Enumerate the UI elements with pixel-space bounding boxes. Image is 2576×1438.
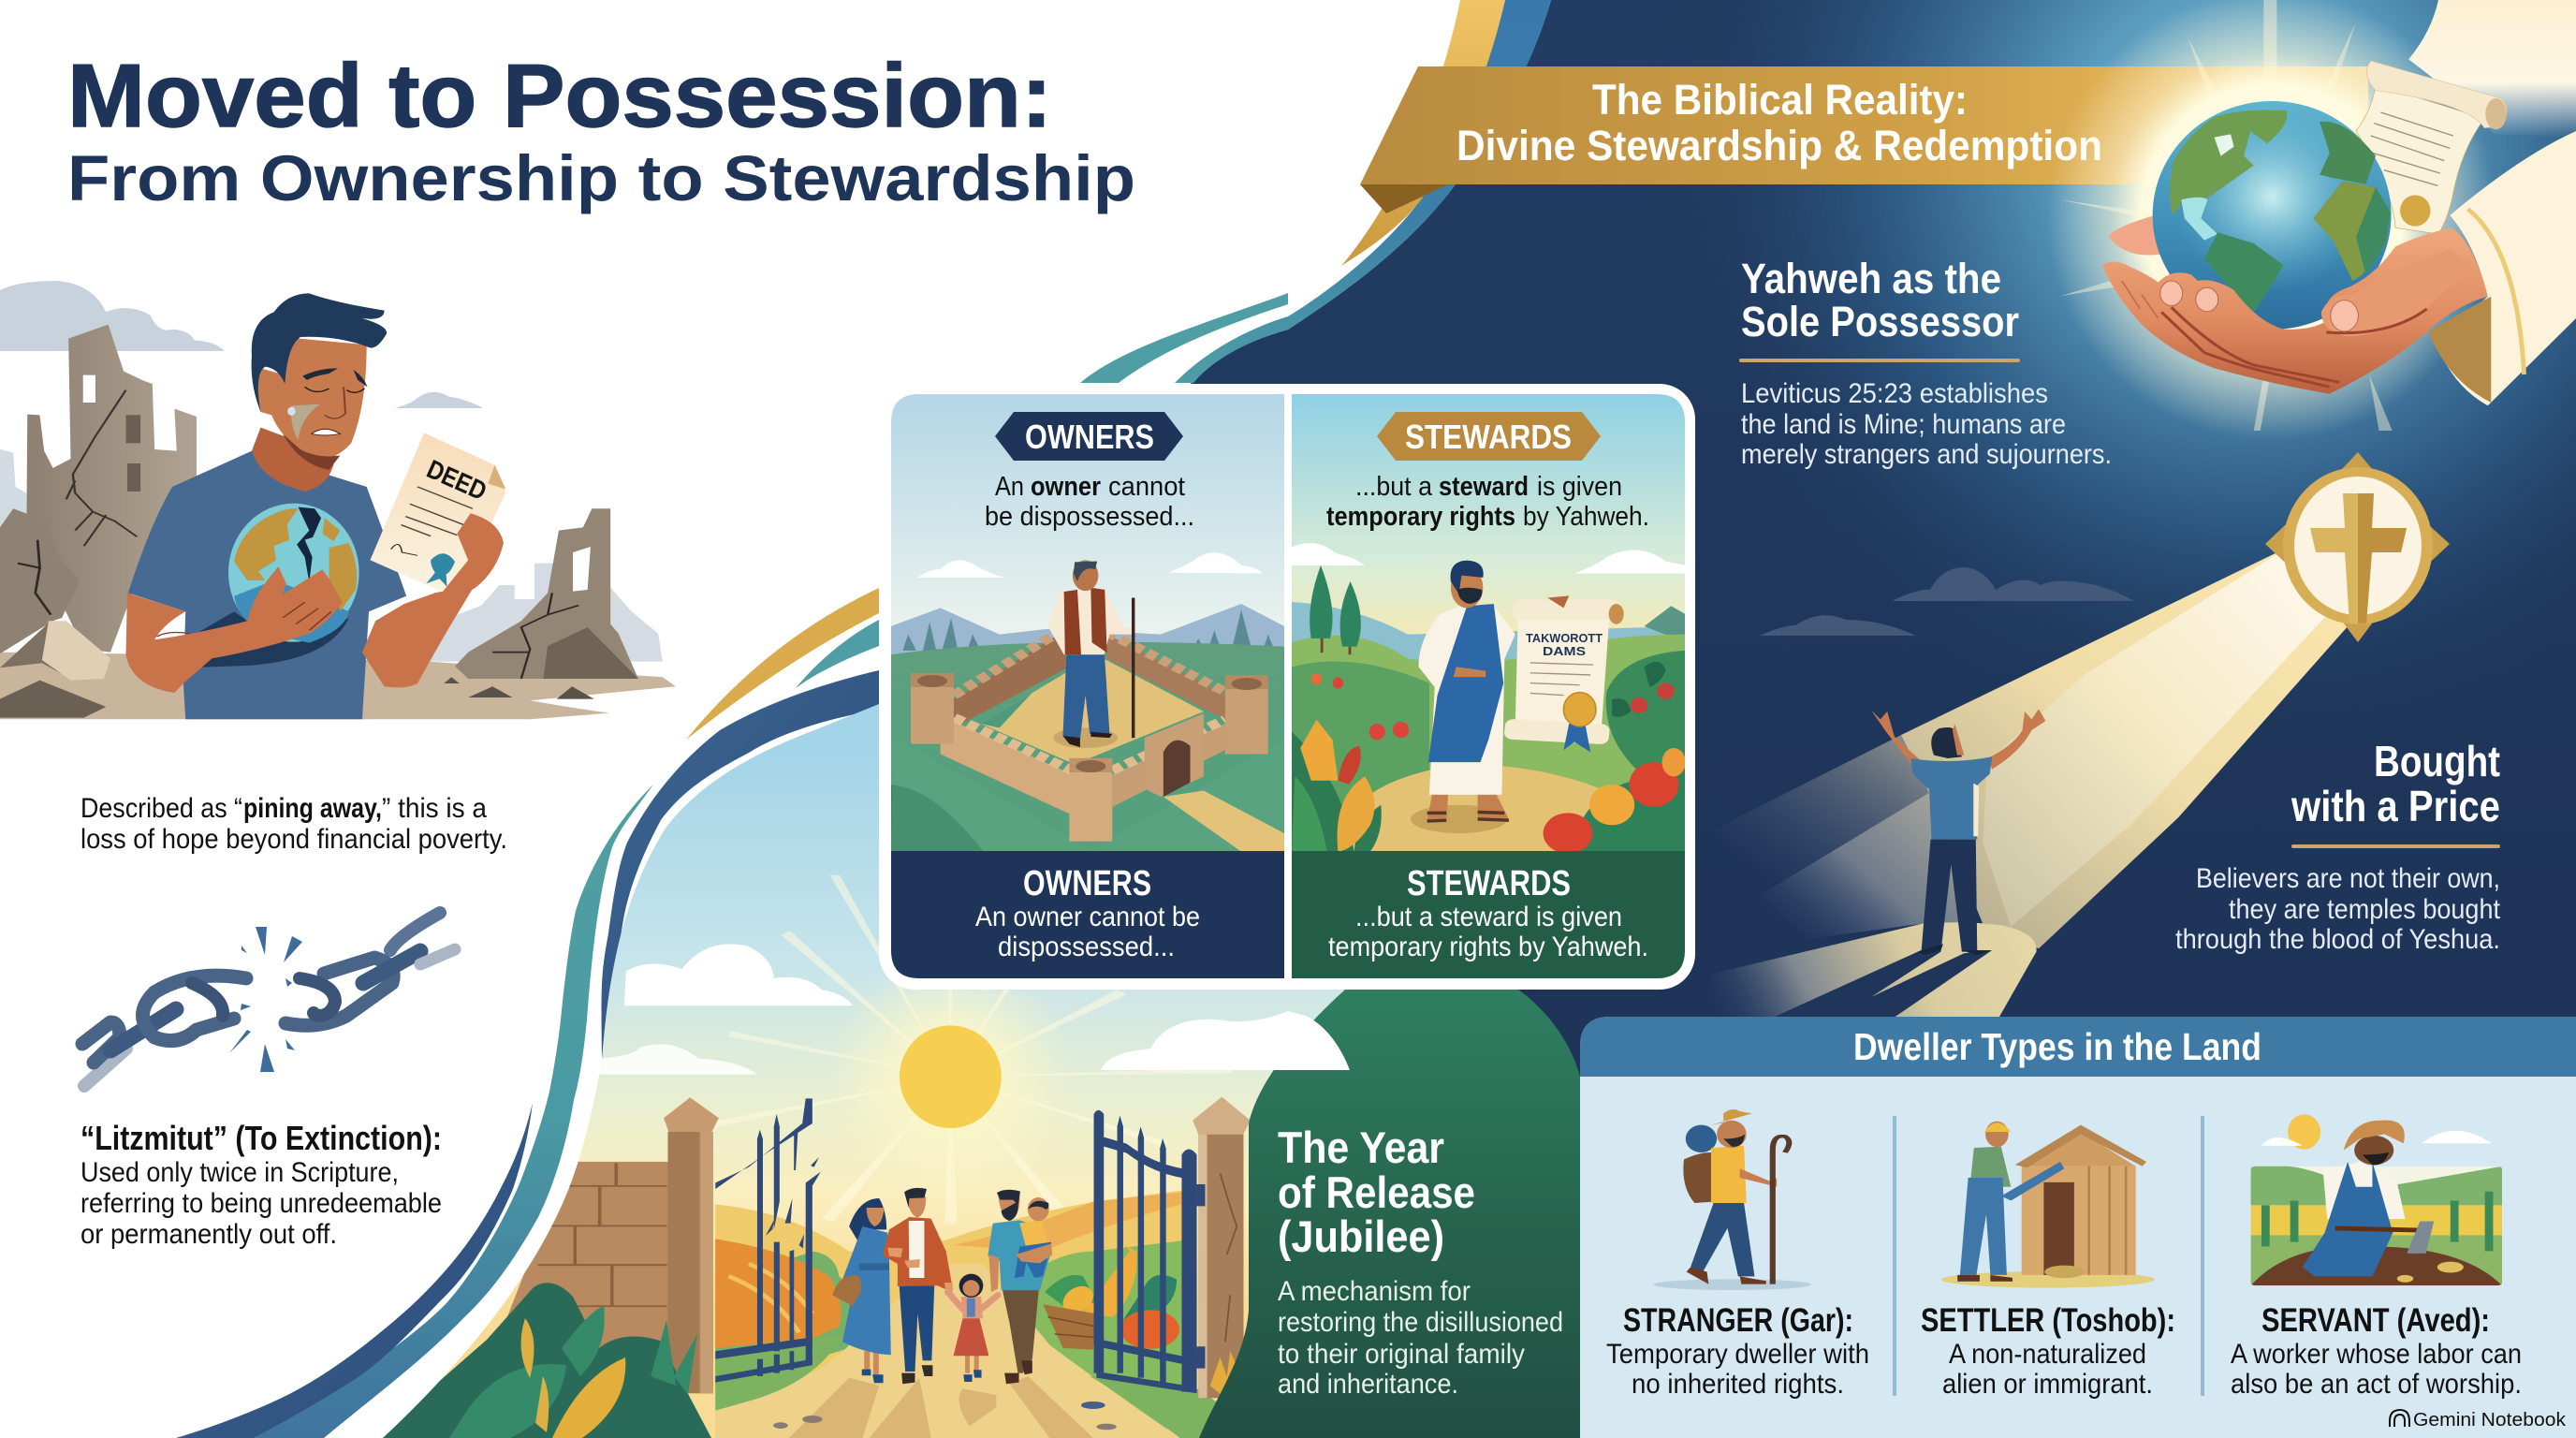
clouds on night sky [1760, 567, 2134, 636]
man hair [252, 293, 387, 412]
stewards caption strip [1292, 851, 1685, 978]
path stones [773, 1401, 1117, 1430]
owners description: owner [1031, 472, 1101, 502]
right gate post [1193, 1097, 1251, 1398]
person [1871, 709, 2045, 955]
rolling hills [715, 1189, 1244, 1438]
swoosh: top gold and blue bands [1080, 0, 1551, 383]
panel: year of release: to their original family [1278, 1339, 1525, 1370]
icon: broken chain [82, 913, 455, 1086]
text: Yahweh as the sole possessor: Sole Possessor [1741, 298, 2019, 345]
text on scroll: DAMS [1543, 644, 1586, 658]
stewards description: ...but a [1355, 472, 1433, 502]
text: bought with a price: they are temples bought [2229, 894, 2501, 925]
child [947, 1274, 998, 1382]
icon: settler and wooden hut [1941, 1122, 2155, 1288]
text: Yahweh as the sole possessor: Leviticus 25:23 establishes [1741, 378, 2048, 409]
title: Moved to Possession: [67, 46, 1052, 146]
owners description: cannot [1108, 472, 1185, 502]
icon: stranger with backpack and staff [1654, 1109, 1811, 1290]
text: bought with a price [2175, 737, 2501, 955]
garden plants [1292, 651, 1686, 854]
sky [383, 704, 1345, 1438]
glow rays [2059, 0, 2393, 431]
light pool [1694, 922, 2037, 1018]
text: Litzmitut: or permanently out off. [80, 1219, 337, 1250]
text: Litzmitut: referring to being unredeemable [80, 1188, 442, 1219]
panel: year of release [1101, 990, 1580, 1438]
stewards caption [1328, 864, 1648, 962]
servant text: A worker whose labor can [2231, 1339, 2522, 1370]
illustration: man with broken globe and deed among ruins [0, 281, 676, 719]
left rocks [0, 508, 110, 718]
stranger text: no inherited rights. [1632, 1369, 1844, 1400]
stone wall [507, 1161, 668, 1348]
owners caption [975, 864, 1200, 962]
stranger text: STRANGER (Gar): [1623, 1302, 1853, 1339]
settler text: SETTLER (Toshob): [1921, 1302, 2175, 1339]
family [832, 1188, 1052, 1384]
stranger text: Temporary dweller with [1606, 1339, 1869, 1370]
owners caption: OWNERS [1023, 864, 1151, 903]
owners description: An [995, 472, 1024, 502]
ground [0, 653, 676, 719]
banner: the biblical reality: The Biblical Reality: [1592, 76, 1968, 124]
harvest basket [1043, 1245, 1179, 1350]
scroll [1503, 595, 1624, 752]
owners caption: An owner cannot be [975, 902, 1200, 932]
sleeve cuff [2428, 131, 2576, 405]
settler text: alien or immigrant. [1942, 1369, 2153, 1400]
stewards caption: temporary rights by Yahweh. [1328, 932, 1648, 962]
panel: stewards [1292, 394, 1686, 978]
woman [832, 1198, 891, 1383]
text: Litzmitut: Used only twice in Scripture, [80, 1157, 399, 1188]
title [67, 46, 1135, 214]
settler text [1921, 1302, 2175, 1400]
text: bought with a price: Bought [2374, 737, 2500, 785]
icon: servant tilling soil [2251, 1114, 2502, 1285]
scroll [2356, 61, 2507, 234]
banner: the biblical reality: Divine Stewardship & Redemption [1456, 122, 2102, 169]
servant text [2231, 1302, 2522, 1400]
clouds [600, 944, 1314, 1075]
text: Yahweh as the sole possessor [1739, 255, 2112, 470]
text: Yahweh as the sole possessor: the land is Mine; humans are [1741, 409, 2066, 440]
owners badge [995, 412, 1183, 461]
watermark: Gemini Notebook [2413, 1410, 2567, 1431]
text on scroll: TAKWOROTT [1526, 631, 1603, 645]
text: bought with a price: Believers are not their own, [2196, 863, 2500, 894]
text on scroll [1526, 631, 1603, 658]
panel: jubilee illustration [383, 704, 1345, 1438]
panel: owners [891, 394, 1284, 978]
word on deed: DEED [423, 454, 490, 506]
panel: dweller types: Dweller Types in the Land [1853, 1025, 2261, 1068]
owners description: be dispossessed... [985, 502, 1194, 532]
broken left iron gate [715, 1098, 821, 1383]
panel: year of release: A mechanism for [1278, 1276, 1471, 1307]
text: Litzmitut: “Litzmitut” (To Extinction): [80, 1119, 442, 1157]
tall ruined tower [26, 325, 197, 653]
navy background panel [1191, 0, 2576, 1438]
swoosh: bands around jubilee scene [176, 588, 879, 1438]
panel: year of release: restoring the disillusioned [1278, 1307, 1563, 1338]
panel: year of release: and inheritance. [1278, 1369, 1458, 1400]
foliage [374, 1283, 711, 1438]
banner: the biblical reality [1360, 66, 2368, 213]
stewards caption: ...but a steward is given [1355, 902, 1622, 932]
title: From Ownership to Stewardship [67, 142, 1135, 214]
icon: cross medallion [2265, 452, 2450, 642]
cloud over green [1101, 1011, 1350, 1070]
steward figure [1418, 561, 1515, 821]
stewards description: is given [1537, 472, 1622, 502]
man shirt [128, 451, 406, 719]
cupped hand [2102, 227, 2488, 394]
sun with rays [707, 857, 1232, 1224]
owners description [985, 472, 1194, 532]
text: pining away: pining away, [243, 793, 382, 824]
settler text: A non-naturalized [1949, 1339, 2146, 1370]
stewards description [1326, 472, 1649, 532]
stewards caption: STEWARDS [1407, 864, 1571, 903]
man [883, 1188, 953, 1384]
broken globe [228, 504, 359, 643]
panel: dweller types [1580, 1017, 2576, 1438]
panel: owners versus stewards card [879, 384, 1695, 990]
servant text: also be an act of worship. [2231, 1369, 2522, 1400]
servant text: SERVANT (Aved): [2261, 1302, 2490, 1339]
man on castle [1047, 560, 1136, 748]
stewards description: by Yahweh. [1523, 502, 1649, 532]
panel: year of release: The Year [1278, 1123, 1444, 1172]
clouds behind ruins [0, 281, 663, 662]
text: pining away: Described as “ [80, 793, 242, 824]
glow [2047, 0, 2496, 440]
man left arm and hand [125, 566, 343, 693]
illustration: hand holding globe with scroll [2047, 0, 2576, 440]
panel: year of release: (Jubilee) [1278, 1211, 1444, 1261]
baby [1015, 1197, 1052, 1278]
text: pining away [80, 793, 507, 855]
hand creases and nails [2122, 281, 2427, 387]
steward landscape [1292, 543, 1685, 852]
thumb tip behind globe [2109, 215, 2161, 256]
sleeve top [2408, 0, 2576, 138]
dweller header [1580, 1017, 2576, 1077]
panel: stewards: STEWARDS [1405, 418, 1572, 456]
panel: owners: OWNERS [1025, 418, 1154, 456]
castle front walls and towers [911, 673, 1268, 842]
globe [2153, 101, 2392, 330]
castle back walls [954, 632, 1228, 727]
left gate post [664, 1097, 719, 1393]
father [988, 1190, 1051, 1384]
shadow under globe [185, 611, 349, 668]
stewards description: steward [1439, 472, 1529, 502]
text: pining away: loss of hope beyond financial poverty. [80, 824, 507, 855]
right ruined wall [444, 508, 638, 699]
text: bought with a price: with a Price [2291, 782, 2500, 830]
owners caption strip [891, 851, 1284, 978]
text: Yahweh as the sole possessor: merely strangers and sujourners. [1741, 439, 2112, 470]
owner landscape [891, 552, 1284, 852]
owners caption: dispossessed... [998, 932, 1175, 962]
man right hand [442, 513, 504, 598]
stranger text [1606, 1302, 1869, 1400]
person shadow [1773, 948, 1992, 1018]
courtyard [981, 654, 1204, 764]
light beam with person [1694, 546, 2355, 1018]
right iron gate [1094, 1110, 1205, 1393]
man right arm [362, 585, 475, 687]
man neck and face [252, 337, 368, 492]
panel: year of release: of Release [1278, 1167, 1475, 1217]
sheaf [1209, 1352, 1236, 1394]
text: bought with a price: through the blood of Yeshua. [2175, 924, 2500, 955]
deed document [370, 433, 505, 597]
text: pining away: ” this is a [382, 793, 487, 824]
text: Litzmitut [80, 1119, 442, 1250]
thumb [2321, 250, 2473, 336]
stewards description: temporary rights [1326, 502, 1515, 532]
text: Yahweh as the sole possessor: Yahweh as the [1741, 255, 2001, 302]
stewards badge [1377, 412, 1601, 461]
